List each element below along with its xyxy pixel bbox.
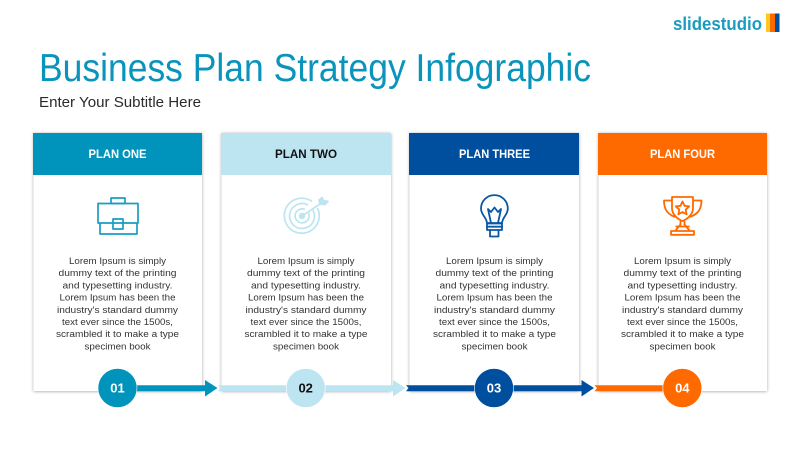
text: plan one: industry's standard dummy: [57, 305, 178, 316]
text: plan two: dummy text of the printing: [247, 268, 365, 279]
text: plan three: text ever since the 1500s,: [439, 317, 550, 328]
text: plan one: Lorem Ipsum is simply: [69, 256, 166, 267]
subtitle: Enter Your Subtitle Here: [39, 95, 201, 111]
text: plan three: [433, 256, 556, 352]
text: plan two: [244, 256, 368, 352]
arrow: step 2: [218, 380, 406, 396]
badge: 03: 03: [487, 380, 501, 396]
text: plan four: industry's standard dummy: [622, 305, 743, 316]
badge: 04: [663, 368, 702, 408]
header: plan one: [33, 133, 202, 175]
text: plan three: Lorem Ipsum has been the: [436, 293, 552, 304]
text: plan two: text ever since the 1500s,: [250, 317, 362, 328]
text: plan four: text ever since the 1500s,: [627, 317, 738, 328]
text: plan one: text ever since the 1500s,: [62, 317, 173, 328]
badge: 01: [98, 368, 137, 408]
badge: 04: 04: [675, 380, 690, 396]
header: plan one: PLAN ONE: [88, 149, 147, 161]
badge: 03: [474, 368, 514, 408]
header: plan four: PLAN FOUR: [650, 149, 716, 161]
text: plan two: and typesetting industry.: [251, 280, 361, 291]
header: plan three: [409, 133, 579, 175]
arrow: step 4: [594, 385, 670, 391]
text: plan one: specimen book: [84, 341, 151, 352]
text: plan two: Lorem Ipsum has been the: [248, 293, 364, 304]
text: plan one: Lorem Ipsum has been the: [60, 293, 176, 304]
icon: light bulb: [481, 195, 508, 236]
badge: 01: 01: [110, 380, 125, 396]
text: plan two: industry's standard dummy: [246, 305, 367, 316]
icon: target: [284, 198, 328, 233]
text: plan three: specimen book: [462, 341, 528, 352]
text: plan three: industry's standard dummy: [434, 305, 555, 316]
badge: 02: [286, 368, 325, 408]
text: plan four: [621, 256, 744, 352]
arrow: step 3: [406, 380, 594, 396]
title: Business Plan Strategy Infographic: [39, 47, 591, 90]
text: plan two: specimen book: [273, 341, 339, 352]
badge: 02: 02: [298, 380, 313, 396]
text: plan three: and typesetting industry.: [440, 280, 550, 291]
text: plan one: [56, 256, 179, 352]
text: plan one: scrambled it to make a type: [56, 329, 179, 340]
text: plan three: dummy text of the printing: [436, 268, 554, 279]
panel: plan four: [598, 133, 767, 391]
header: plan four: [598, 133, 767, 175]
text: plan two: scrambled it to make a type: [244, 329, 368, 340]
text: plan three: scrambled it to make a type: [433, 329, 556, 340]
text: plan one: dummy text of the printing: [58, 268, 176, 279]
icon: briefcase: [98, 198, 138, 234]
header: plan two: PLAN TWO: [275, 149, 337, 161]
text: plan three: Lorem Ipsum is simply: [446, 256, 543, 267]
header: plan two: [221, 133, 391, 175]
text: plan four: specimen book: [650, 341, 716, 352]
text: plan four: scrambled it to make a type: [621, 329, 744, 340]
icon: trophy: [664, 197, 702, 235]
text: plan four: Lorem Ipsum is simply: [634, 256, 731, 267]
panel: plan two: [221, 133, 391, 391]
panel: plan one: [33, 133, 202, 391]
panel: plan three: [409, 133, 579, 391]
header: plan three: PLAN THREE: [459, 149, 530, 161]
text: plan four: Lorem Ipsum has been the: [624, 293, 740, 304]
text: plan four: and typesetting industry.: [628, 280, 738, 291]
arrow: step 1: [130, 380, 218, 396]
text: plan one: and typesetting industry.: [62, 280, 172, 291]
text: plan four: dummy text of the printing: [624, 268, 742, 279]
text: plan two: Lorem Ipsum is simply: [258, 256, 355, 267]
logo: slidestudio: [673, 13, 762, 34]
